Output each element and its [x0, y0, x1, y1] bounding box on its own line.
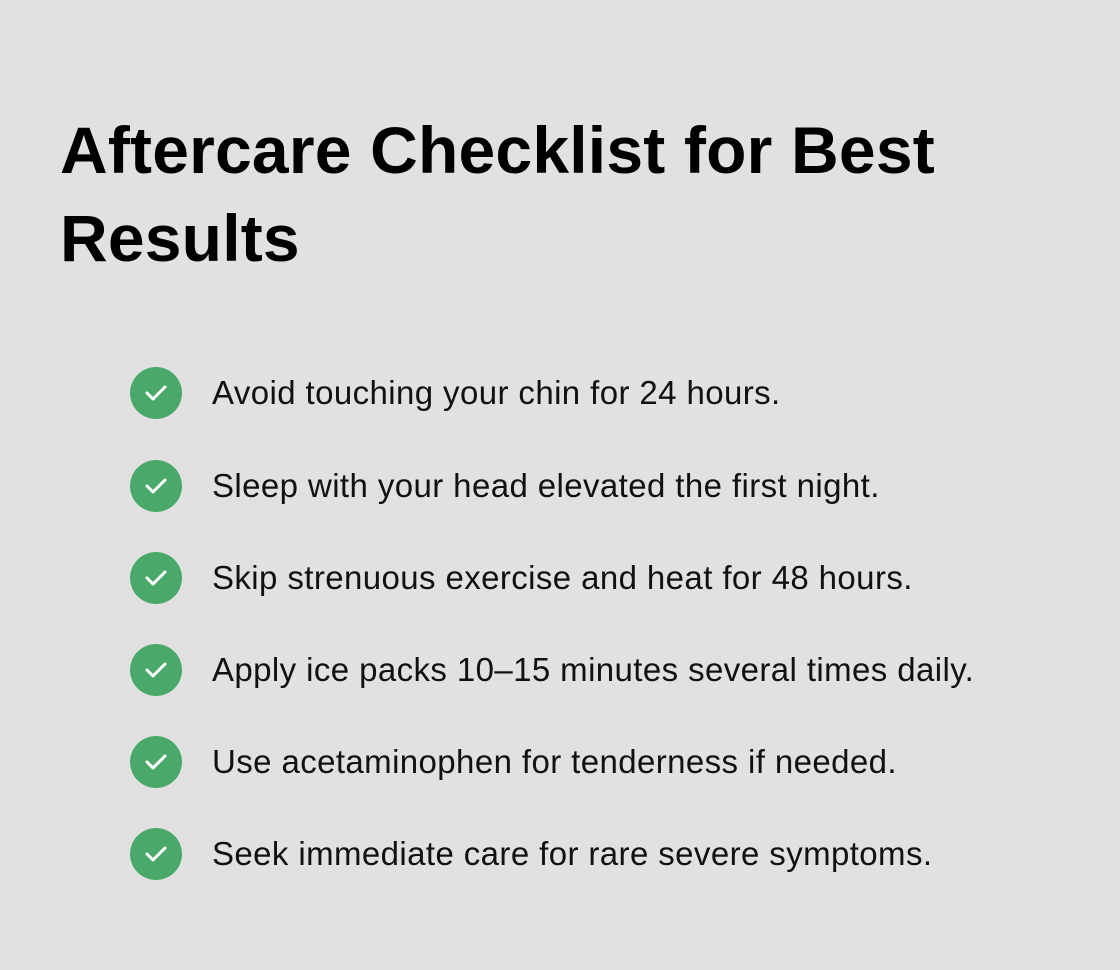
item 2: Sleep with your head elevated the first night.: [212, 467, 880, 504]
item 6: [130, 828, 932, 880]
item 2: [130, 460, 880, 512]
title: Aftercare Checklist for Best: [60, 113, 935, 187]
item 4: [130, 644, 974, 696]
item 3: [130, 552, 913, 604]
item 5: [130, 736, 897, 788]
title: [60, 113, 935, 275]
title: Results: [60, 201, 300, 275]
item 6: Seek immediate care for rare severe symptoms.: [212, 835, 932, 872]
item 4: Apply ice packs 10–15 minutes several times daily.: [212, 651, 974, 688]
item 3: Skip strenuous exercise and heat for 48 hours.: [212, 559, 913, 596]
item 1: Avoid touching your chin for 24 hours.: [212, 374, 781, 411]
item 1: [130, 367, 781, 419]
item 5: Use acetaminophen for tenderness if needed.: [212, 743, 897, 780]
